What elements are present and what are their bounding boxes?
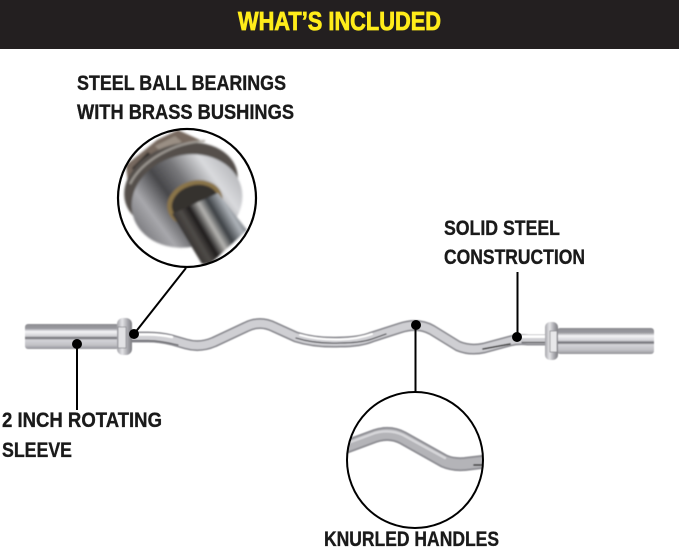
callout: rotating sleeve marker [72,339,82,410]
left collar [117,318,132,355]
label: solid steel construction: CONSTRUCTION [444,246,585,269]
title: WHAT’S INCLUDED [238,6,441,36]
label: 2 inch rotating sleeve: SLEEVE [2,439,72,462]
header band [0,0,679,49]
label: steel ball bearings: WITH BRASS BUSHINGS [77,101,294,124]
detail circle: knurled handle [340,392,490,528]
callout: knurled handle marker [411,320,421,392]
right sleeve [557,328,654,354]
leader line: bearing [134,268,186,334]
left sleeve [25,324,119,349]
shaft [130,324,548,349]
label: solid steel construction: SOLID STEEL [444,217,560,240]
right collar [545,322,558,360]
callout: solid steel marker [512,272,522,342]
label: 2 inch rotating sleeve [2,409,162,462]
marker: bearing [129,329,139,339]
label: steel ball bearings: STEEL BALL BEARINGS [77,72,286,95]
label: steel ball bearings [77,72,294,124]
label: knurled handles: KNURLED HANDLES [324,528,499,551]
curl bar [25,318,654,360]
label: solid steel construction [444,217,585,269]
label: 2 inch rotating sleeve: 2 INCH ROTATING [2,409,162,432]
detail circle: bearing and brass bushing [113,129,256,267]
